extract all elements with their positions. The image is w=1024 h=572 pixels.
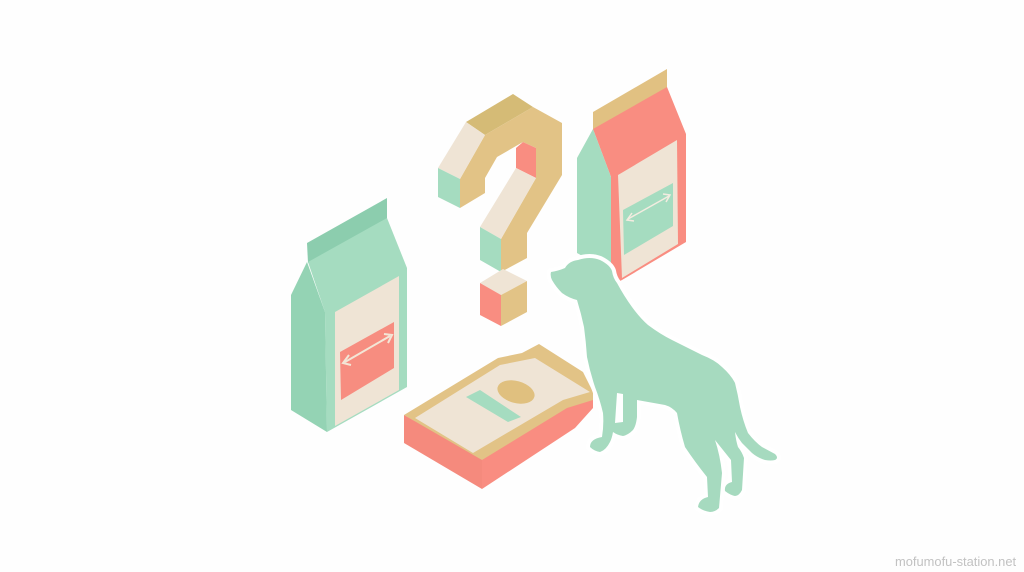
label oval [495,376,537,408]
dog silhouette [551,258,777,512]
question mark dot cube [480,269,527,326]
flat food bag lying down [404,344,593,489]
question mark [438,94,562,326]
double arrow on right bag [627,194,670,221]
right food bag (red) [577,69,686,282]
watermark: mofumofu-station.net [895,554,1017,569]
double arrow on left bag [343,334,392,365]
left food bag (green) [291,198,407,432]
label stripe [466,390,521,422]
